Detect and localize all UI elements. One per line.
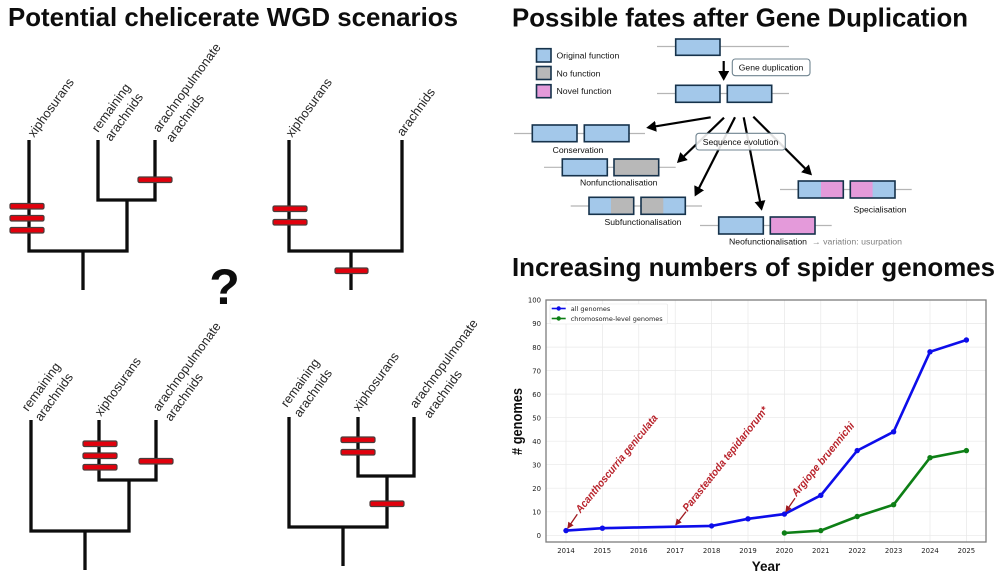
- taxon labels: xiphosurans: [282, 75, 335, 140]
- annotation: Argiope bruennichi: Argiope bruennichi: [789, 419, 858, 500]
- x axis tick labels: 2022: [848, 547, 866, 555]
- taxon labels: arachnids: [101, 90, 146, 144]
- x axis tick labels: 2024: [921, 547, 939, 555]
- y axis tick labels: 30: [532, 461, 541, 469]
- panel: tree scenario top right: [273, 75, 438, 290]
- legend: Novel function: [556, 86, 612, 96]
- title: spider genomes: Increasing numbers of spider genomes: [512, 252, 995, 282]
- annotation: Acanthoscurria geniculata: Acanthoscurria geniculata: [573, 412, 661, 516]
- taxon labels: remaining: [277, 355, 322, 410]
- chart legend: [550, 304, 668, 324]
- chart legend: all genomes: [571, 305, 611, 313]
- x axis tick labels: 2020: [776, 547, 793, 555]
- taxon labels: [24, 40, 224, 145]
- taxon labels: arachnids: [162, 91, 207, 145]
- WGD bar on arachnopulmonates: [138, 177, 172, 182]
- x axis tick labels: 2023: [885, 547, 902, 555]
- x axis tick labels: 2025: [958, 547, 975, 555]
- taxon labels: arachnopulmonate: [149, 319, 224, 414]
- y axis tick labels: 0: [537, 532, 541, 540]
- legend: No function: [556, 68, 601, 78]
- taxon labels: [282, 75, 438, 140]
- y axis tick labels: 100: [528, 297, 541, 305]
- taxon labels: arachnids: [31, 370, 76, 424]
- plot frame: [546, 300, 986, 542]
- x axis tick labels: 2018: [703, 547, 720, 555]
- WGD bar on ancestral branch: [370, 501, 404, 506]
- outcome: subfunctionalisation: [571, 197, 702, 227]
- WGD bars on xiphosurans: [341, 437, 375, 455]
- y axis tick labels: 50: [532, 414, 541, 422]
- taxon labels: arachnids: [161, 370, 206, 424]
- y axis tick labels: 80: [532, 344, 541, 352]
- grid: [546, 300, 986, 542]
- taxon labels: arachnopulmonate: [406, 316, 481, 411]
- y axis tick labels: 60: [532, 391, 541, 399]
- arrow: duplication: [723, 61, 725, 78]
- panel: tree scenario bottom right: [277, 316, 481, 566]
- outcome: neofunctionalisation: Neofunctionalisation: [729, 237, 807, 247]
- y axis tick labels: 10: [532, 508, 541, 516]
- x axis title: Year: [752, 559, 781, 574]
- y axis tick labels: 40: [532, 438, 541, 446]
- WGD bar on stem: [335, 268, 368, 274]
- taxon labels: arachnids: [290, 366, 335, 420]
- callout: gene duplication: [732, 59, 810, 76]
- legend: [536, 49, 619, 98]
- y axis title: # genomes: [510, 388, 526, 455]
- panel: gene duplication fates diagram: [514, 39, 912, 247]
- taxon labels: arachnids: [420, 367, 465, 421]
- outcome: subfunctionalisation: Subfunctionalisation: [605, 217, 682, 227]
- outcome: specialisation: Specialisation: [853, 205, 907, 215]
- arrows: sequence evolution outcomes: [649, 117, 810, 208]
- outcome: specialisation: [780, 181, 912, 215]
- taxon labels: xiphosurans: [91, 354, 144, 419]
- duplicated genes: [657, 85, 789, 102]
- WGD bars on xiphosurans: [273, 206, 307, 225]
- taxon labels: xiphosurans: [349, 349, 402, 414]
- x axis tick labels: 2019: [739, 547, 757, 555]
- taxon labels: xiphosurans: [24, 75, 77, 140]
- line chart: spider genomes per year: [510, 297, 986, 574]
- outcome: neofunctionalisation: [700, 217, 902, 247]
- outcome: conservation: [514, 125, 645, 155]
- x axis tick labels: 2015: [594, 547, 611, 555]
- taxon labels: remaining: [88, 80, 133, 135]
- taxon labels: [18, 319, 224, 424]
- taxon labels: arachnids: [393, 85, 438, 139]
- outcome: neofunctionalisation: → variation: usurpation: [812, 238, 902, 247]
- y axis tick labels: [528, 297, 541, 540]
- title: chelicerate WGD scenarios: Potential chelicerate WGD scenarios: [8, 2, 458, 32]
- annotation: Parasteatoda tepidariorum: Parasteatoda tepidariorum*: [680, 404, 771, 514]
- WGD bar on arachnopulmonates: [139, 458, 173, 464]
- outcome: nonfunctionalisation: [544, 159, 676, 188]
- outcome: conservation: Conservation: [553, 145, 604, 155]
- taxon labels: [277, 316, 481, 421]
- original gene: [657, 39, 789, 55]
- y axis tick labels: 90: [532, 320, 541, 328]
- chart legend: chromosome-level genomes: [571, 315, 663, 323]
- callout: sequence evolution: [696, 133, 785, 150]
- title: fates after gene duplication: Possible fates after Gene Duplication: [512, 2, 968, 32]
- icon: question mark: ?: [209, 259, 240, 315]
- panel: tree scenario top left: [10, 40, 224, 290]
- callout: sequence evolution: Sequence evolution: [703, 137, 778, 147]
- series: all genomes: [563, 337, 969, 533]
- taxon labels: arachnopulmonate: [149, 40, 224, 135]
- x axis tick labels: 2014: [557, 547, 575, 555]
- y axis tick labels: 70: [532, 367, 541, 375]
- x axis tick labels: 2021: [812, 547, 830, 555]
- series: chromosome-level genomes: [782, 448, 969, 536]
- outcome: nonfunctionalisation: Nonfunctionalisation: [580, 178, 658, 188]
- callout: gene duplication: Gene duplication: [739, 62, 803, 72]
- x axis tick labels: [557, 547, 975, 555]
- panel: tree scenario bottom left: [18, 319, 224, 570]
- WGD bars on xiphosurans: [83, 441, 117, 470]
- taxon labels: remaining: [18, 359, 63, 414]
- x axis tick labels: 2017: [666, 547, 684, 555]
- x axis tick labels: 2016: [630, 547, 648, 555]
- y axis tick labels: 20: [532, 485, 541, 493]
- WGD bars on xiphosurans: [10, 204, 44, 233]
- legend: Original function: [556, 50, 619, 60]
